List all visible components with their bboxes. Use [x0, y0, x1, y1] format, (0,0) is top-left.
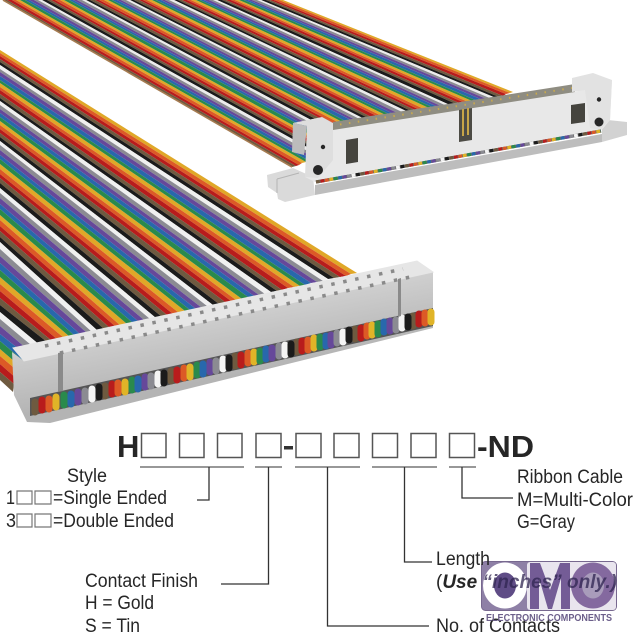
connector top face with contact holes	[13, 261, 433, 361]
connector front and end	[12, 272, 433, 423]
label: ribbon cable: Ribbon Cable	[517, 467, 623, 488]
label: length: (Use “inches” only.)	[436, 572, 617, 593]
watermark logo	[482, 562, 616, 624]
slot left	[346, 138, 358, 164]
label: contact finish: Contact Finish	[85, 571, 198, 592]
upper connector	[267, 73, 627, 202]
label: style: 1	[6, 488, 15, 509]
slot right	[571, 103, 585, 124]
pin rail	[333, 84, 575, 132]
lower ribbon cable	[0, 50, 357, 392]
watermark logo: ELECTRONIC COMPONENTS	[486, 613, 612, 624]
left post	[293, 117, 333, 178]
bottom strip	[315, 134, 602, 195]
right post	[572, 73, 612, 130]
screw holes	[313, 97, 604, 175]
label: style: =Double Ended	[53, 511, 174, 532]
spool backing	[30, 308, 433, 416]
part number code	[117, 429, 534, 464]
coloured wire dot row	[316, 131, 601, 182]
label: contact finish: H = Gold	[85, 593, 154, 614]
foot right	[602, 120, 627, 142]
coloured wire ends	[35, 312, 431, 412]
label: ribbon cable: G=Gray	[517, 512, 575, 533]
upper ribbon cable	[3, 0, 513, 167]
label: length	[436, 549, 617, 593]
label: ribbon cable	[517, 467, 634, 533]
slot left	[58, 352, 63, 392]
label: ribbon cable: M=Multi-Color	[517, 490, 634, 511]
label: style: 3	[6, 511, 16, 532]
label: contact finish: S = Tin	[85, 616, 140, 637]
hyphen	[284, 446, 293, 450]
lower connector	[12, 261, 433, 423]
label: length: Length	[436, 549, 490, 570]
label: contact finish	[85, 571, 198, 637]
foot left	[267, 168, 315, 202]
suffix ND: -ND	[477, 429, 534, 464]
label: style: =Single Ended	[53, 488, 167, 509]
label: number of contacts: No. of Contacts	[436, 616, 560, 637]
left post side	[292, 123, 307, 155]
label: style: Style	[67, 466, 107, 487]
leader lines	[140, 467, 513, 626]
prefix H: H	[117, 429, 139, 464]
label: style	[6, 466, 174, 532]
slot right	[398, 278, 401, 317]
code boxes	[142, 434, 474, 458]
centre notch	[459, 108, 472, 142]
connector front face	[305, 80, 612, 182]
